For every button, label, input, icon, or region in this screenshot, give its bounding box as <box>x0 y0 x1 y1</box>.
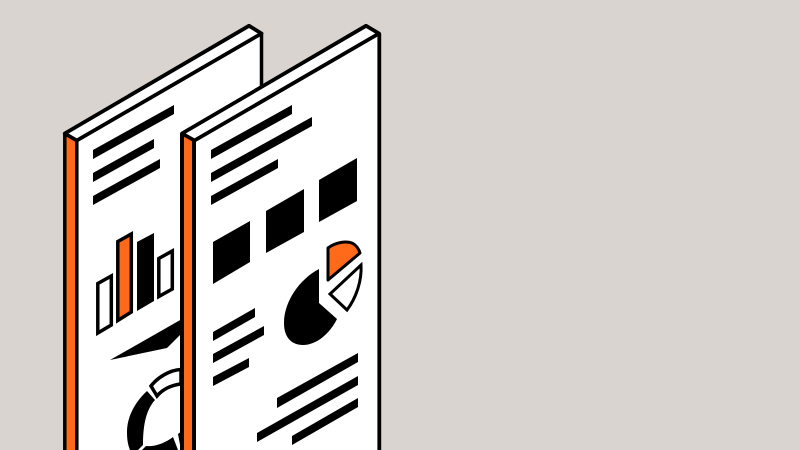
top edge <box>182 26 379 140</box>
text lines: front page top <box>211 105 312 205</box>
page outlines <box>65 34 262 450</box>
page face <box>76 34 262 450</box>
wedge shape <box>110 319 182 360</box>
orange spine <box>183 135 194 450</box>
text lines: back page top <box>93 105 174 205</box>
panel: front report page <box>182 26 379 450</box>
orange spine <box>65 135 76 450</box>
squares row <box>213 158 357 284</box>
top edge <box>65 26 262 140</box>
text lines: front page middle <box>213 308 264 386</box>
pie chart <box>284 242 361 345</box>
page outlines <box>182 134 194 450</box>
page face <box>194 34 379 450</box>
text lines: front page bottom <box>257 353 358 445</box>
bar chart <box>98 233 172 333</box>
donut chart <box>127 370 182 450</box>
panel: back report page <box>65 26 262 450</box>
